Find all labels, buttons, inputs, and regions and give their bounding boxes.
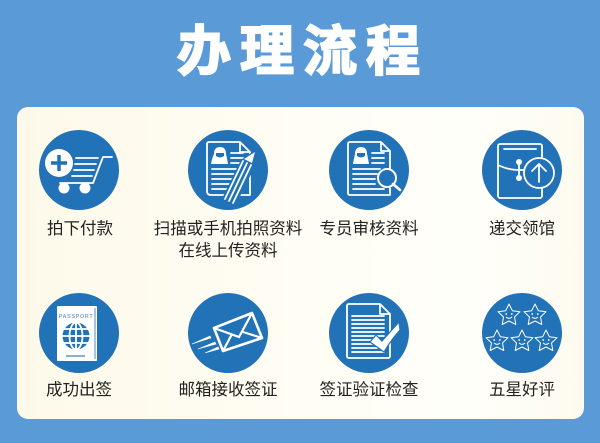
label line 2: 在线上传资料 — [178, 241, 278, 260]
step 8: five stars — [482, 293, 562, 399]
step 3: review — [320, 130, 418, 238]
icon: envelope — [188, 293, 268, 373]
step 2: upload — [154, 130, 302, 260]
label: 递交领馆 — [489, 219, 555, 238]
icon: document and magnifier — [329, 130, 409, 210]
label: 拍下付款 — [47, 219, 114, 238]
label: 成功出签 — [46, 380, 112, 399]
label: 邮箱接收签证 — [178, 380, 278, 399]
label: 专员审核资料 — [320, 219, 418, 238]
label: 扫描或手机拍照资料 — [154, 219, 302, 238]
label: 签证验证检查 — [320, 380, 418, 399]
icon: five stars — [482, 293, 562, 373]
step 4: submit — [482, 130, 562, 238]
icon: shopping cart — [39, 130, 119, 210]
step 5: success — [39, 293, 119, 399]
panel: process steps — [17, 107, 584, 419]
title: 办理流程 — [177, 7, 429, 86]
icon: document with check mark — [329, 293, 409, 373]
icon: passport: PASSPORT — [59, 314, 93, 320]
icon: document and pencil — [188, 130, 268, 210]
icon: folder with upload arrow — [482, 130, 562, 210]
step 7: check — [320, 293, 418, 399]
step 6: mail — [178, 293, 278, 399]
step 1: pay — [39, 130, 119, 238]
label: 五星好评 — [489, 380, 555, 399]
